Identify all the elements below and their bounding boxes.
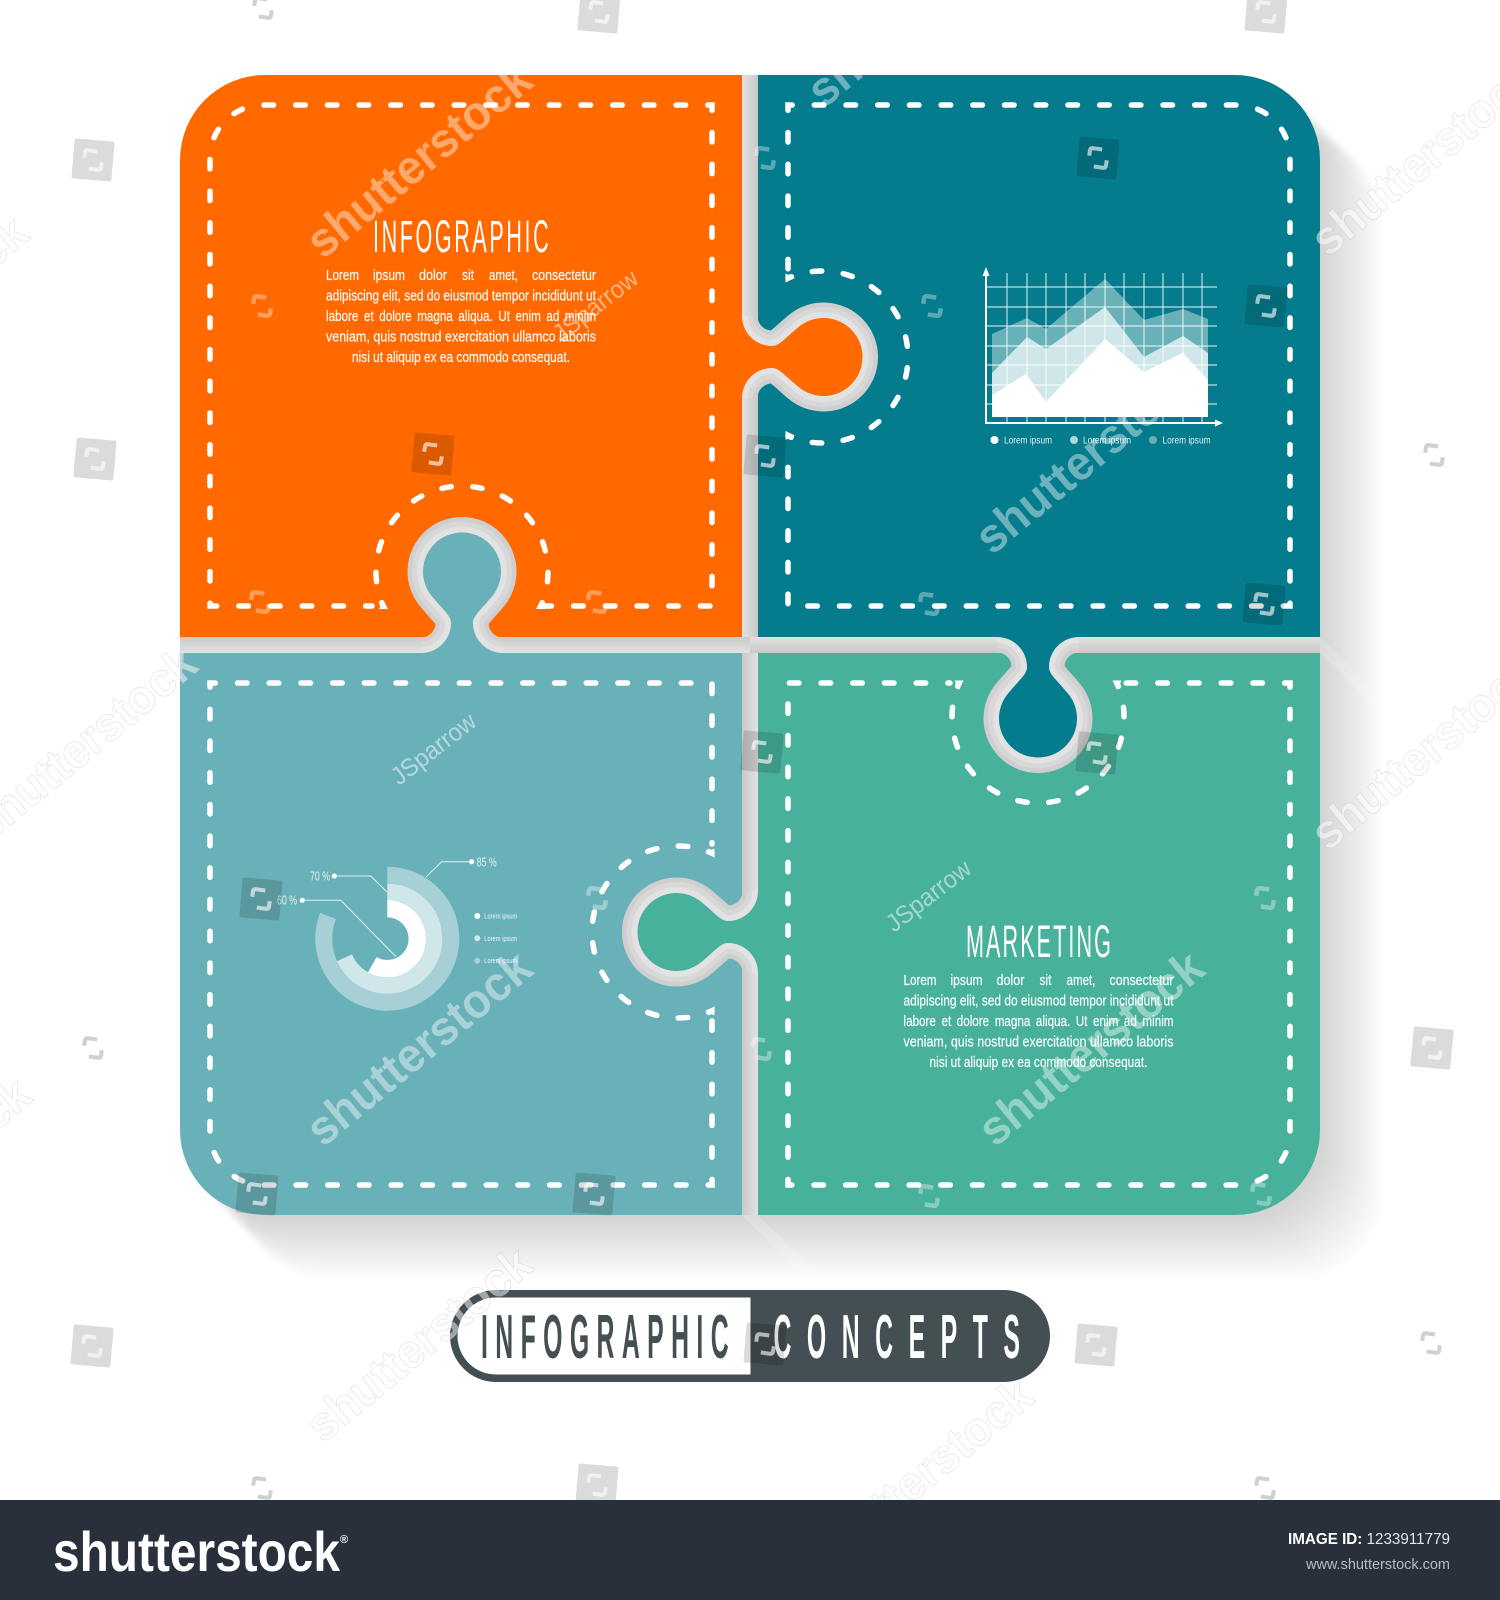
text block: orange paragraph: nisi ut aliquip ex ea commodo consequat. <box>352 349 570 366</box>
watermark wordmarks: shutterstock <box>965 348 1211 564</box>
text block: orange paragraph: consectetur <box>532 267 596 284</box>
donut legend: Lorem ipsum <box>484 912 517 920</box>
long shadow <box>183 78 1383 1278</box>
donut chart <box>277 854 517 1002</box>
text block: orange paragraph: adipiscing elit, sed do eiusmod tempor incididunt ut <box>326 288 597 304</box>
panel: teal piece <box>758 75 1320 637</box>
text block: green paragraph: consectetur <box>1110 972 1174 989</box>
text block: green paragraph <box>904 972 1174 1071</box>
watermark contributor names: JSparrow <box>881 854 977 938</box>
panel: green piece <box>758 653 1320 1215</box>
stitched outline: teal <box>786 105 1290 606</box>
stitched outline: blue <box>210 683 714 1185</box>
watermark contributor names: JSparrow <box>386 707 482 791</box>
puzzle tab: teal into green <box>978 613 1098 758</box>
donut legend: Lorem ipsum <box>484 934 517 943</box>
footer logo: shutterstock <box>53 1520 341 1583</box>
text block: orange paragraph: Lorem <box>326 267 359 284</box>
text block: orange paragraph: amet, <box>489 267 518 284</box>
footer bar <box>0 1500 1500 1600</box>
chart legend: Lorem ipsum <box>1162 436 1210 446</box>
text block: green paragraph: nisi ut aliquip ex ea commodo consequat. <box>930 1054 1148 1071</box>
chart axes <box>982 267 1223 426</box>
text block: orange paragraph: ipsum <box>373 267 405 284</box>
shadow breaks below the gaps <box>742 637 1390 1285</box>
stitched outline: green <box>788 680 1290 1185</box>
panel: blue piece <box>180 653 742 1215</box>
donut labels: 85 % <box>477 854 497 870</box>
donut callouts <box>302 862 472 957</box>
watermark wordmarks: shutterstock <box>296 52 542 268</box>
watermark wordmarks: shutterstock <box>968 940 1214 1156</box>
chart legend: Lorem ipsum <box>1004 436 1052 446</box>
donut rings <box>324 875 451 1002</box>
heading: MARKETING: MARKETING <box>966 917 1111 967</box>
donut labels <box>277 854 497 908</box>
chart areas <box>992 279 1208 417</box>
watermark contributor names <box>386 264 977 938</box>
panel: orange piece <box>180 75 742 637</box>
text block: green paragraph: sit <box>1040 972 1052 989</box>
footer site: www.shutterstock.com <box>1305 1556 1450 1573</box>
heading: INFOGRAPHIC: INFOGRAPHIC <box>373 212 549 262</box>
stitched outline: orange <box>210 105 712 609</box>
donut legend <box>474 912 517 965</box>
text block: green paragraph: labore et dolore magna aliqua. Ut enim ad minim <box>904 1013 1174 1030</box>
text block: orange paragraph <box>326 267 597 366</box>
chart legend: Lorem ipsum <box>1083 436 1131 446</box>
watermark wordmarks: shutterstock <box>296 1236 542 1452</box>
text block: orange paragraph: dolor <box>419 267 447 284</box>
text block: green paragraph: veniam, quis nostrud exercitation ullamco laboris <box>904 1034 1174 1050</box>
donut labels: 70 % <box>310 869 330 884</box>
area chart <box>982 267 1223 446</box>
badge: infographic concepts: INFOGRAPHIC <box>481 1303 729 1372</box>
donut labels: 60 % <box>277 893 297 908</box>
footer image id: IMAGE ID: 1233911779 <box>1288 1531 1450 1548</box>
text block: green paragraph: Lorem <box>904 972 936 989</box>
footer registered mark: ® <box>340 1534 348 1546</box>
chart grid <box>986 273 1217 423</box>
puzzle tab: blue into orange <box>402 532 522 677</box>
text block: orange paragraph: labore et dolore magna aliqua. Ut enim ad minim <box>326 308 596 325</box>
watermark wordmarks: shutterstock <box>797 1368 1043 1584</box>
watermark contributor names: JSparrow <box>548 264 644 348</box>
text block: orange paragraph: veniam, quis nostrud exercitation ullamco laboris <box>326 328 596 346</box>
text block: green paragraph: ipsum <box>950 972 982 989</box>
text block: green paragraph: dolor <box>996 972 1024 989</box>
text block: orange paragraph: sit <box>462 267 475 284</box>
puzzle tab: green into blue <box>637 872 782 992</box>
text block: green paragraph: adipiscing elit, sed do eiusmod tempor incididunt ut <box>904 992 1174 1010</box>
text block: green paragraph: amet, <box>1066 972 1096 989</box>
gaps between puzzle pieces <box>180 75 1320 1215</box>
chart legend <box>990 436 1210 446</box>
badge: infographic concepts: CONCEPTS <box>774 1303 1020 1372</box>
donut legend: Lorem ipsum <box>484 956 517 965</box>
watermark wordmarks: shutterstock <box>296 940 542 1156</box>
badge: infographic concepts <box>450 1290 1050 1382</box>
puzzle tab: orange into teal <box>718 297 863 417</box>
